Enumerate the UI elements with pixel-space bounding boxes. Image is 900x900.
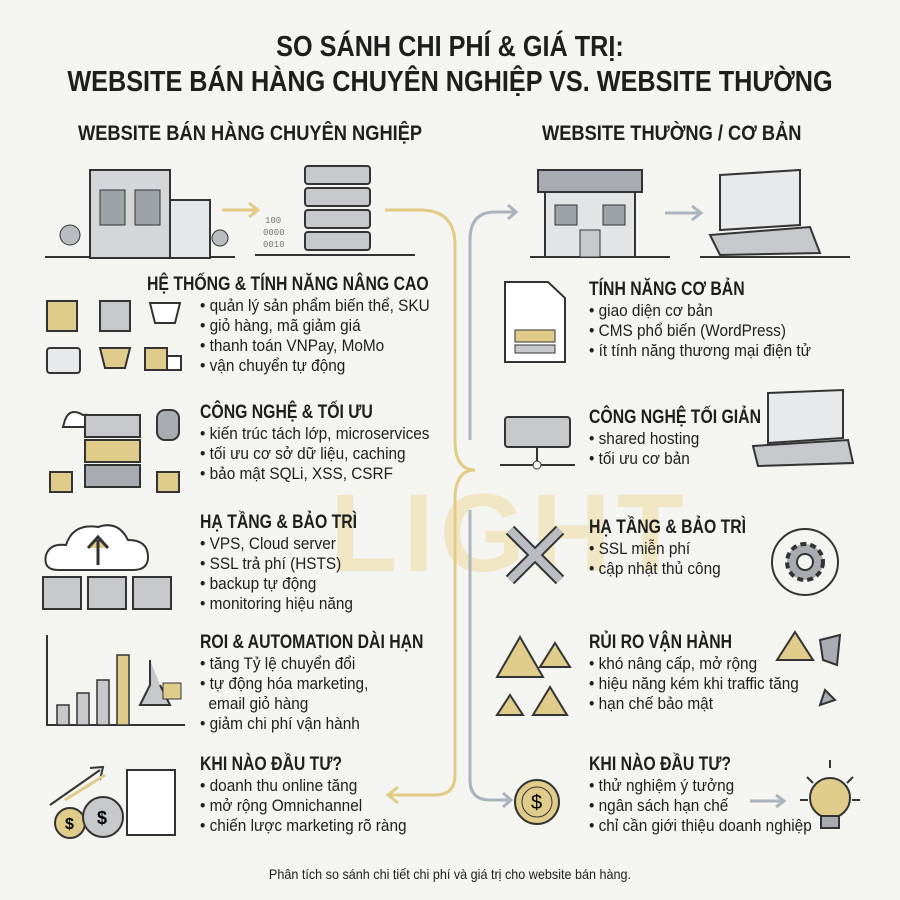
section left 1: • vận chuyển tự động — [200, 357, 345, 375]
icon: server stack: 100 — [265, 216, 281, 226]
arrow gray — [665, 205, 704, 221]
section left 4: email giỏ hàng — [209, 695, 308, 713]
footer: Phân tích so sánh chi tiết chi phí và giá trị cho website bán hàng. — [269, 866, 631, 882]
section left 4: • tăng Tỷ lệ chuyển đổi — [200, 655, 355, 673]
icon: document — [504, 281, 566, 363]
section right 1: TÍNH NĂNG CƠ BẢN — [589, 278, 745, 300]
section right 5: • thử nghiệm ý tưởng — [589, 777, 734, 795]
icon: warning broken — [775, 630, 842, 707]
arrow gray small — [750, 794, 786, 808]
section left 5: KHI NÀO ĐẦU TƯ? — [200, 753, 342, 775]
section left 1: • quản lý sản phẩm biến thể, SKU — [200, 297, 430, 315]
section left 4: • tự động hóa marketing, — [200, 675, 368, 693]
icon: layered stack — [49, 409, 180, 493]
icon: server stack — [255, 165, 415, 256]
section left 4: ROI & AUTOMATION DÀI HẠN — [200, 631, 423, 653]
section left 2: • bảo mật SQLi, XSS, CSRF — [200, 465, 393, 483]
section right 5: • chỉ cần giới thiệu doanh nghiệp — [589, 817, 812, 835]
section right 4: • khó nâng cấp, mở rộng — [589, 655, 757, 673]
icon: gear cycle — [771, 528, 839, 596]
section right 4: • hạn chế bảo mật — [589, 695, 713, 713]
icon: server stack: 0010 — [263, 240, 285, 250]
icon: coin: $ — [531, 792, 542, 814]
title: WEBSITE BÁN HÀNG CHUYÊN NGHIỆP VS. WEBSITE THƯỜNG — [67, 66, 833, 98]
icon: money bags: $ — [65, 816, 74, 833]
icon: light bulb — [800, 760, 860, 829]
icon: cloud gauges — [42, 524, 172, 610]
section left 2: • tối ưu cơ sở dữ liệu, caching — [200, 445, 406, 463]
section left 3: • monitoring hiệu năng — [200, 595, 353, 613]
icon: laptop — [700, 168, 850, 258]
icon: bar chart robot — [46, 635, 185, 726]
section left 2: • kiến trúc tách lớp, microservices — [200, 425, 429, 443]
section left 5: • mở rộng Omnichannel — [200, 797, 362, 815]
section left 5 — [200, 752, 407, 835]
section left 2 — [200, 400, 429, 483]
section left 3: • SSL trả phí (HSTS) — [200, 555, 341, 573]
section right 4 — [589, 630, 799, 713]
section right 2: CÔNG NGHỆ TỐI GIẢN — [589, 406, 761, 428]
icon: boxes cart truck — [46, 300, 182, 374]
section right 4: • hiệu năng kém khi traffic tăng — [589, 675, 799, 693]
left column header: WEBSITE BÁN HÀNG CHUYÊN NGHIỆP — [78, 122, 422, 145]
section right 1 — [589, 278, 811, 360]
section left 5: • doanh thu online tăng — [200, 777, 357, 795]
section left 3: • backup tự động — [200, 575, 316, 593]
section right 1: • CMS phổ biến (WordPress) — [589, 322, 786, 340]
section right 5 — [589, 752, 812, 835]
right column header: WEBSITE THƯỜNG / CƠ BẢN — [542, 122, 801, 145]
icon: office building — [45, 169, 235, 259]
section left 4: • giảm chi phí vận hành — [200, 715, 360, 733]
section right 2 — [589, 405, 761, 468]
section left 4 — [200, 630, 423, 733]
section left 3: • VPS, Cloud server — [200, 535, 336, 553]
section right 2: • tối ưu cơ bản — [589, 450, 690, 468]
section left 1: HỆ THỐNG & TÍNH NĂNG NÂNG CAO — [147, 273, 429, 295]
icon: single server — [500, 416, 575, 470]
icon: house — [530, 169, 670, 258]
icon: money bags — [50, 766, 176, 839]
icon: money bags: $ — [97, 808, 107, 828]
section right 5: KHI NÀO ĐẦU TƯ? — [589, 753, 731, 775]
section right 2: • shared hosting — [589, 430, 699, 448]
section left 3: HẠ TẦNG & BẢO TRÌ — [200, 511, 357, 533]
section right 3: • SSL miễn phí — [589, 540, 690, 558]
section right 1: • giao diện cơ bản — [589, 302, 713, 320]
section right 1: • ít tính năng thương mại điện tử — [589, 342, 811, 360]
title: SO SÁNH CHI PHÍ & GIÁ TRỊ: — [276, 31, 624, 63]
section left 1: • thanh toán VNPay, MoMo — [200, 337, 384, 355]
section right 3: HẠ TẦNG & BẢO TRÌ — [589, 516, 746, 538]
icon: coin — [514, 779, 560, 825]
arrow gold — [222, 202, 260, 218]
icon: wrenches — [506, 526, 564, 584]
section left 2: CÔNG NGHỆ & TỐI ƯU — [200, 401, 373, 423]
section right 3 — [589, 516, 746, 578]
section left 1: • giỏ hàng, mã giảm giá — [200, 317, 361, 335]
section right 5: • ngân sách hạn chế — [589, 797, 728, 815]
title — [67, 30, 833, 98]
section left 5: • chiến lược marketing rõ ràng — [200, 817, 407, 835]
icon: server stack: 0000 — [263, 228, 285, 238]
watermark: LIGHT — [330, 472, 690, 595]
section left 1 — [147, 272, 430, 375]
icon: laptop small — [752, 389, 854, 467]
icon: warnings — [495, 635, 572, 716]
section right 4: RỦI RO VẬN HÀNH — [589, 631, 732, 653]
section right 3: • cập nhật thủ công — [589, 560, 721, 578]
section left 3 — [200, 510, 357, 613]
